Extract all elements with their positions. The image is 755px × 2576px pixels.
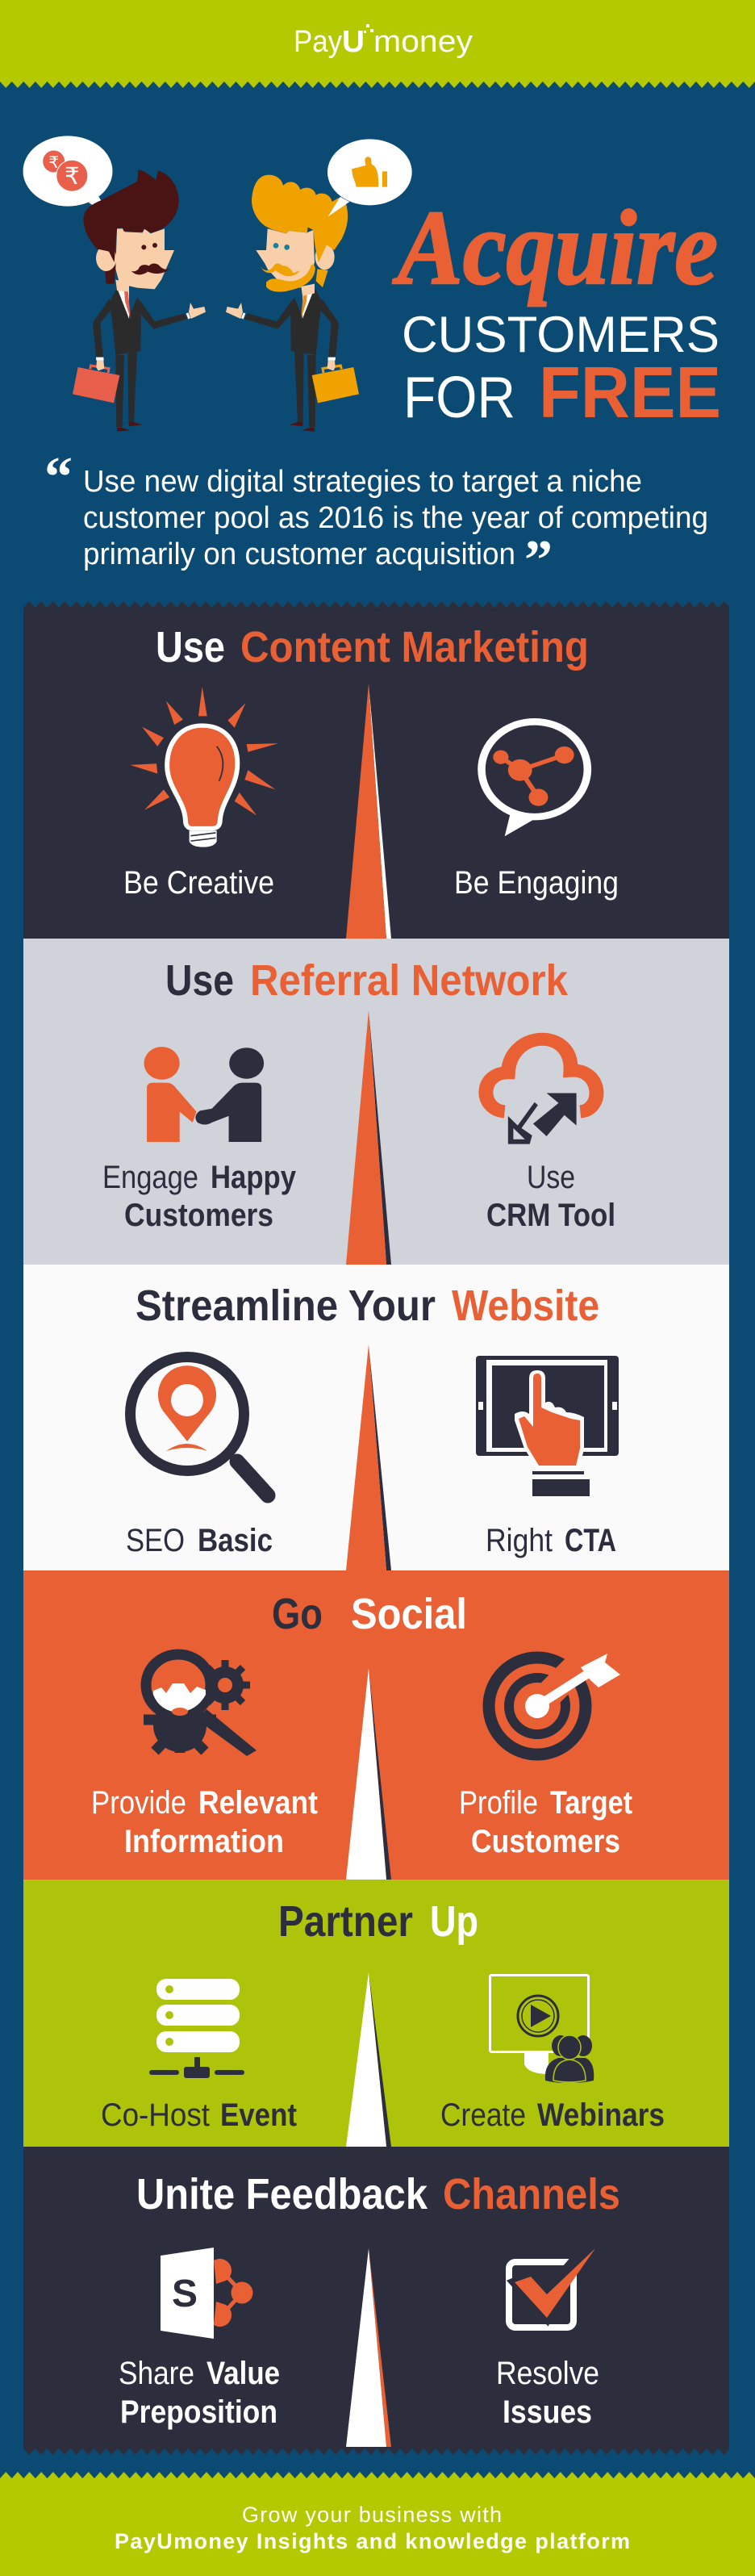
title: Acquire Customers for Free: FOR: [403, 366, 515, 430]
heading: [136, 2170, 620, 2218]
icon: check box: [509, 2248, 597, 2327]
label: Resolve: [496, 2356, 599, 2391]
footer band: [0, 2472, 755, 2576]
label: [440, 2097, 665, 2133]
label: Profile: [459, 1785, 538, 1821]
label: [486, 1160, 615, 1233]
label: Create: [440, 2097, 526, 2133]
character: man with moustache: [23, 136, 206, 432]
panel: use referral network: [23, 939, 729, 1265]
logo: PayUmoney: [294, 24, 473, 59]
label: Basic: [198, 1523, 273, 1558]
intro quote: customer pool as 2016 is the year of competing: [83, 501, 708, 535]
label: Target: [550, 1785, 632, 1821]
divider spike: [346, 1668, 391, 1880]
intro quote: “: [44, 446, 73, 508]
label: Be Creative: [123, 865, 274, 901]
title: Acquire Customers for Free: Acquire: [393, 188, 718, 307]
title: Acquire Customers for Free: FREE: [539, 353, 721, 433]
speech bubble: rupee coins: ₹: [48, 153, 59, 172]
label: Use: [527, 1160, 575, 1195]
label: CRM Tool: [486, 1198, 615, 1233]
speech bubble: thumbs up: [327, 139, 412, 216]
footer text: Grow your business with: [242, 2503, 502, 2527]
divider spike: [346, 1344, 391, 1570]
logo: PayUmoney: money: [373, 25, 473, 59]
icon: tablet touch: [476, 1356, 619, 1496]
speech bubble: rupee coins: ₹: [65, 162, 80, 190]
icon: cloud sync: [486, 1039, 596, 1144]
logo: PayUmoney: Pay: [294, 25, 342, 59]
footer text: [115, 2503, 630, 2553]
divider spike: [346, 1010, 391, 1265]
heading: Use: [165, 956, 234, 1005]
heading: Use: [156, 623, 225, 671]
label: Customers: [124, 1198, 273, 1233]
label: CTA: [565, 1523, 616, 1558]
label: [126, 1523, 273, 1558]
heading: Channels: [443, 2170, 620, 2218]
label: [486, 1523, 616, 1558]
label: Be Engaging: [454, 865, 619, 901]
icon: server network: [149, 1979, 244, 2078]
icon: sharepoint: [161, 2248, 253, 2339]
label: Happy: [211, 1160, 297, 1195]
label: Relevant: [198, 1785, 318, 1821]
label: Engage: [102, 1160, 198, 1195]
heading: [272, 1590, 467, 1638]
intro quote: [44, 446, 708, 592]
label: [119, 2356, 280, 2430]
heading: Streamline Your: [136, 1282, 436, 1330]
label: Preposition: [120, 2394, 277, 2430]
divider spike: [346, 2248, 391, 2447]
icon: sharepoint: S: [172, 2273, 198, 2315]
panel: unite feedback channels: [23, 2147, 729, 2455]
intro quote: Use new digital strategies to target a niche: [83, 465, 642, 499]
heading: Up: [430, 1897, 478, 1946]
icon: magnifier with gears: [144, 1654, 257, 1756]
logo: PayUmoney: U: [342, 25, 365, 59]
panel: partner up: [23, 1880, 729, 2147]
label: Provide: [91, 1785, 186, 1821]
label: Value: [206, 2356, 280, 2391]
label: [91, 1785, 318, 1859]
icon: light bulb: [130, 687, 278, 847]
icon: magnifier with map pin: [131, 1357, 268, 1495]
heading: Website: [452, 1282, 599, 1330]
title: Acquire Customers for Free: CUSTOMERS: [402, 307, 720, 363]
label: Right: [486, 1523, 553, 1558]
label: Co-Host: [101, 2097, 210, 2133]
speech bubble: rupee coins: [23, 136, 113, 218]
label: Share: [119, 2356, 194, 2391]
header band: [0, 0, 755, 88]
label: Information: [124, 1824, 284, 1859]
heading: Referral Network: [250, 956, 569, 1005]
icon: target with arrow: [489, 1654, 620, 1754]
label: Issues: [503, 2394, 592, 2430]
label: Event: [220, 2097, 297, 2133]
heading: Social: [351, 1590, 467, 1638]
label: Webinars: [537, 2097, 665, 2133]
heading: Content Marketing: [240, 623, 589, 671]
character: man with orange hair: [226, 139, 412, 432]
footer text: PayUmoney Insights and knowledge platform: [115, 2529, 630, 2553]
intro quote: ”: [524, 529, 553, 592]
label: [459, 1785, 632, 1859]
label: [102, 1160, 297, 1233]
title: Acquire Customers for Free: [393, 188, 721, 433]
panel: use content marketing: [23, 601, 729, 939]
label: Customers: [471, 1824, 620, 1859]
divider spike: [346, 684, 391, 939]
label: [101, 2097, 297, 2133]
heading: Unite Feedback: [136, 2170, 428, 2218]
label: SEO: [126, 1523, 185, 1558]
icon: chat network: [482, 721, 587, 836]
icon: webinar monitor: [490, 1976, 594, 2083]
icon: handshake: [144, 1047, 264, 1142]
divider spike: [346, 1972, 391, 2147]
label: [496, 2356, 599, 2430]
intro quote: primarily on customer acquisition: [83, 537, 515, 571]
panel: streamline your website: [23, 1265, 729, 1570]
panel: go social: [23, 1570, 729, 1880]
heading: Partner: [278, 1897, 413, 1946]
heading: Go: [272, 1590, 323, 1638]
